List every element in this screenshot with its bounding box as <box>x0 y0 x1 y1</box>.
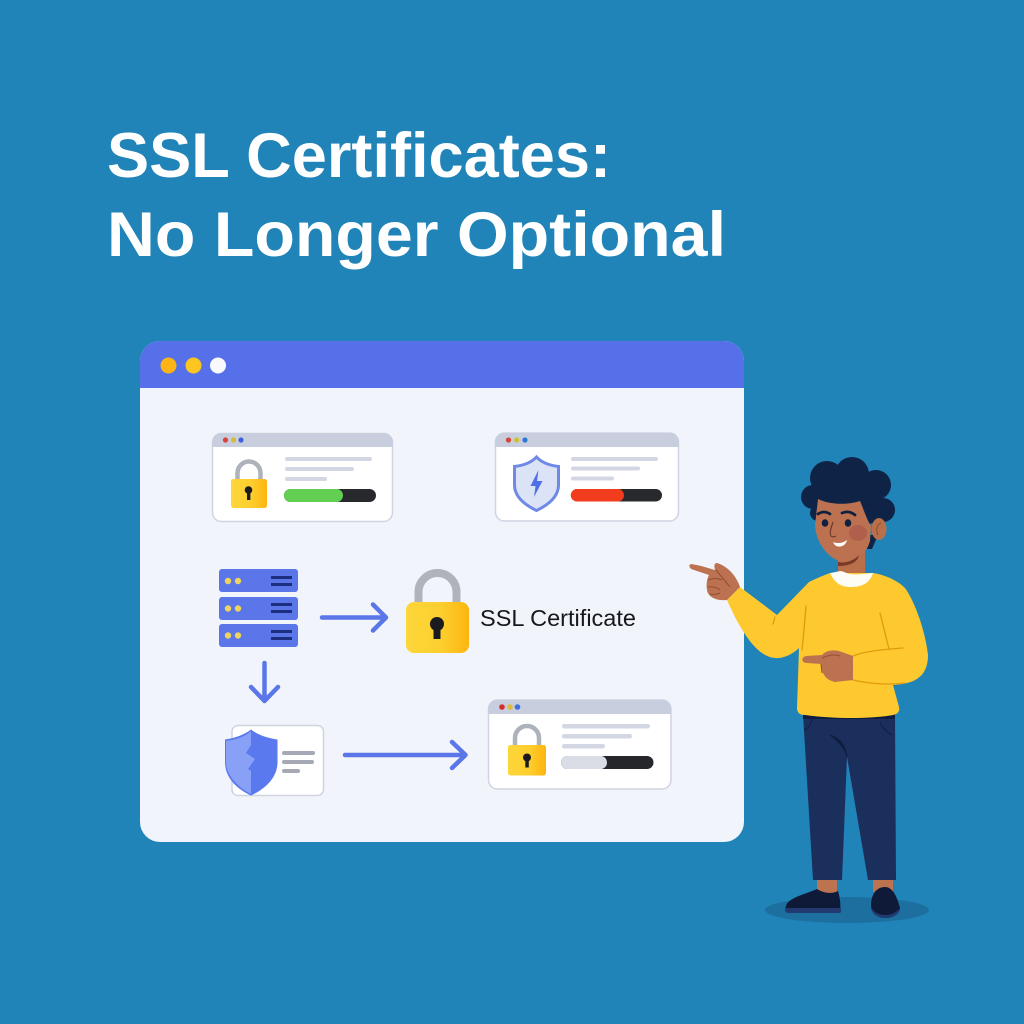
panel: warning site card with red bar <box>495 433 679 521</box>
panel: secure site card with green bar <box>212 433 393 522</box>
shoes <box>785 887 900 918</box>
face <box>815 499 871 562</box>
progress bar: green <box>284 489 376 502</box>
hair back <box>801 457 895 549</box>
illustration: person pointing <box>689 457 929 923</box>
collar <box>830 571 873 587</box>
panel: resulting secure site card <box>488 700 671 789</box>
icon: server stack <box>219 569 298 647</box>
arrow: server to shield <box>251 663 278 701</box>
hand: pointing at self <box>802 650 853 682</box>
panel: shield card <box>225 726 324 796</box>
window control dots <box>160 358 226 374</box>
title: SSL Certificates: <box>107 121 611 191</box>
label: SSL Certificate: SSL Certificate <box>480 605 636 631</box>
progress bar: red <box>571 489 662 502</box>
icon: large padlock <box>406 573 469 653</box>
hand: pointing left <box>689 563 740 600</box>
arrow: shield to secure site <box>345 742 466 768</box>
progress bar: grey <box>561 756 654 769</box>
title: No Longer Optional <box>107 200 726 270</box>
icon: split shield <box>225 730 278 796</box>
facial features <box>818 512 859 566</box>
arrow: server to certificate <box>322 604 386 630</box>
ground shadow <box>765 897 929 923</box>
ear <box>872 518 886 540</box>
cheek <box>849 525 867 541</box>
icon: padlock <box>508 726 546 776</box>
title <box>107 121 726 270</box>
sweater <box>727 573 928 718</box>
ankles <box>817 878 893 896</box>
panel: browser window <box>140 341 744 842</box>
pants <box>803 714 896 880</box>
icon: padlock <box>231 462 267 508</box>
neck <box>838 552 865 578</box>
icon: shield with bolt <box>514 457 558 510</box>
